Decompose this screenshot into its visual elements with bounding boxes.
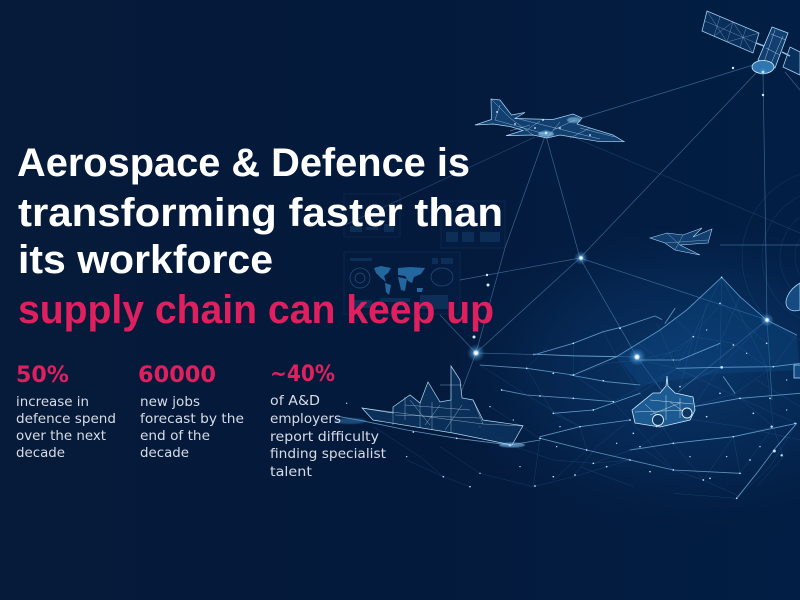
satellite <box>702 11 800 75</box>
stat description: over the next <box>16 428 106 444</box>
stat value: 50% <box>16 363 69 388</box>
stat: new jobs <box>138 363 244 461</box>
stat description: of A&D <box>270 393 320 409</box>
armoured vehicle <box>632 376 695 427</box>
stat description: report difficulty <box>270 429 379 445</box>
title: transforming faster than <box>18 191 503 235</box>
world map <box>374 266 425 295</box>
stat description: decade <box>140 445 189 461</box>
stat description: decade <box>16 445 65 461</box>
satellite solar panels <box>702 11 800 75</box>
satellite dish <box>752 60 774 74</box>
stat value: ~40% <box>270 362 335 387</box>
stat description <box>140 394 244 461</box>
small aircraft <box>650 228 712 255</box>
satellite arm <box>756 43 790 56</box>
right-edge dish <box>786 283 800 311</box>
stat: defence spend <box>16 363 116 461</box>
radar rings <box>742 169 800 345</box>
satellite body <box>758 27 788 68</box>
stat description: talent <box>270 464 312 480</box>
stat value: 60000 <box>138 363 216 388</box>
terrain glow <box>400 230 800 550</box>
stat description: employers <box>270 411 341 427</box>
stat description: increase in <box>16 394 89 410</box>
title <box>17 141 503 332</box>
network links <box>345 62 800 400</box>
stat description <box>270 393 386 480</box>
large aircraft <box>475 99 624 142</box>
right-edge module <box>794 365 800 378</box>
stat description: new jobs <box>140 394 200 410</box>
network nodes <box>467 67 774 366</box>
stat description <box>16 394 116 461</box>
warship <box>334 366 525 448</box>
stat description: defence spend <box>16 411 116 427</box>
stat description: finding specialist <box>270 446 386 462</box>
stat description: end of the <box>140 428 210 444</box>
dashboard panels <box>344 194 505 314</box>
title: its workforce <box>18 238 273 282</box>
stat description: forecast by the <box>140 411 244 427</box>
mountain face <box>617 277 800 385</box>
terrain mesh <box>340 276 800 499</box>
title: supply chain can keep up <box>18 288 494 332</box>
title: Aerospace & Defence is <box>17 141 470 185</box>
stat: specialist talent <box>270 362 386 480</box>
